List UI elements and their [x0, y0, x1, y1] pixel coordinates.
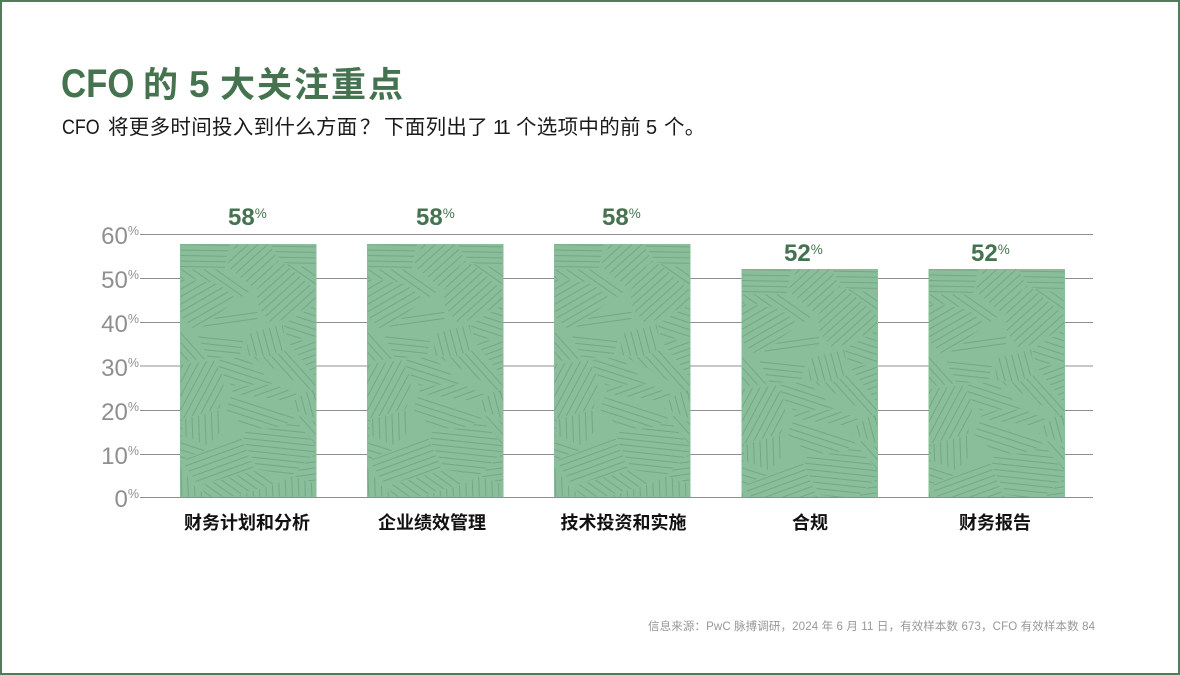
value labels: 58	[228, 204, 255, 231]
value labels: %	[998, 242, 1010, 257]
y axis labels: 20	[101, 399, 128, 426]
value labels: %	[629, 206, 641, 221]
category labels: 企业绩效管理	[378, 512, 486, 533]
y axis labels: 50	[101, 267, 128, 294]
category labels	[184, 512, 1031, 533]
y axis labels: %	[128, 400, 139, 414]
title: CFO	[61, 61, 134, 106]
subtitle	[62, 116, 706, 139]
y axis labels: 60	[101, 223, 128, 250]
category labels: 财务计划和分析	[184, 513, 310, 533]
y axis labels: %	[128, 224, 139, 238]
y axis labels: 40	[101, 311, 128, 338]
bar: 企业绩效管理 58%	[367, 244, 504, 497]
title: 的	[143, 66, 178, 105]
value labels: %	[811, 242, 823, 257]
bar chart	[101, 204, 1093, 533]
value labels: 58	[416, 204, 443, 231]
y axis labels: %	[128, 356, 139, 370]
y axis labels: 30	[101, 355, 128, 382]
y axis labels	[101, 223, 139, 513]
y axis grid lines	[140, 234, 1093, 498]
y axis labels: 10	[101, 443, 128, 470]
value labels: 58	[602, 204, 629, 231]
y axis labels: %	[128, 312, 139, 326]
title	[61, 61, 405, 106]
y axis labels: 0	[115, 486, 128, 513]
y axis labels: %	[128, 444, 139, 458]
subtitle: CFO	[62, 116, 100, 139]
subtitle: 将更多时间投入到什么方面	[108, 116, 358, 139]
bar: 合规 52%	[742, 269, 878, 497]
title: 大关注重点	[220, 66, 405, 105]
subtitle: 下面列出了	[384, 116, 488, 139]
value labels	[228, 204, 1010, 267]
y axis labels: %	[128, 268, 139, 282]
category labels: 合规	[792, 512, 828, 533]
title: 5	[189, 64, 210, 105]
value labels: %	[443, 206, 455, 221]
category labels: 技术投资和实施	[560, 512, 686, 533]
bar: 财务报告 52%	[928, 269, 1065, 497]
subtitle: ？	[360, 116, 380, 139]
subtitle: 个。	[664, 116, 706, 139]
subtitle: 5	[646, 117, 657, 139]
bar: 技术投资和实施 58%	[554, 244, 691, 497]
bar: 财务计划和分析 58%	[180, 244, 317, 497]
value labels: %	[255, 206, 267, 221]
y axis labels: %	[128, 487, 139, 501]
source note: 信息来源：PwC 脉搏调研，2024 年 6 月 11 日，有效样本数 673，CFO 有效样本数 84	[648, 619, 1096, 633]
value labels: 52	[784, 240, 811, 267]
value labels: 52	[971, 240, 998, 267]
subtitle: 11	[493, 117, 511, 139]
subtitle: 个选项中的前	[516, 116, 641, 139]
category labels: 财务报告	[959, 513, 1031, 533]
